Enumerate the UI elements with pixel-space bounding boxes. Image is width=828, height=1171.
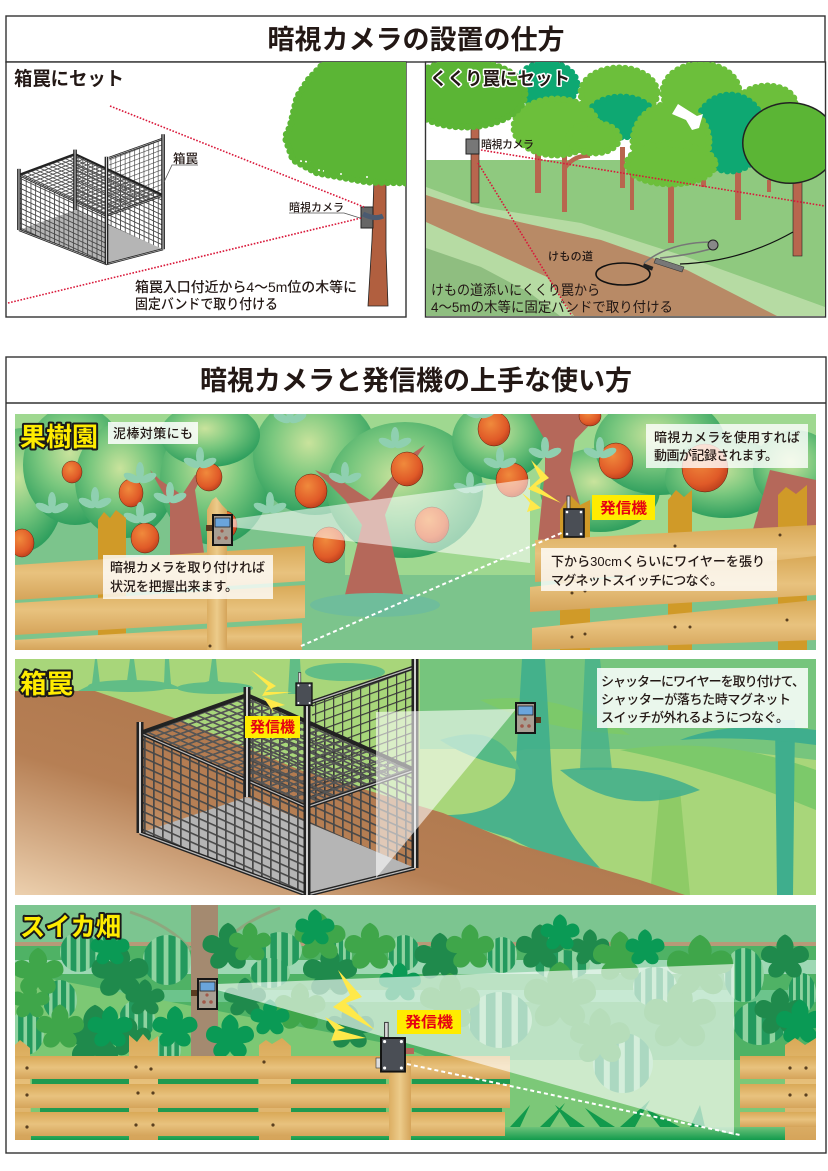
- panel: snare trap setup: [405, 61, 828, 317]
- callout: video: 動画が記録されます。: [654, 448, 778, 463]
- cage illustration: [19, 134, 163, 264]
- camera: [191, 979, 217, 1009]
- panel: watermelon field: [8, 905, 824, 1140]
- callout: shutter: シャッターが落ちた時マグネット: [601, 692, 791, 707]
- callout: video: [646, 424, 808, 468]
- heading: snare trap: くくり罠にセット: [430, 69, 570, 89]
- callout: shutter: シャッターにワイヤーを取り付けて、: [601, 674, 805, 689]
- centre post: [389, 1060, 411, 1140]
- dashed wire: [301, 531, 566, 646]
- background trees: [514, 63, 795, 243]
- callout: video: 暗視カメラを使用すれば: [654, 430, 800, 445]
- lightning: [522, 460, 561, 512]
- field scene: [8, 905, 824, 1140]
- left tree: [426, 62, 528, 204]
- red dotted camera range lines: [8, 106, 364, 303]
- tree: [130, 905, 280, 1070]
- watermelons: [8, 932, 816, 1093]
- back posts: [98, 485, 807, 650]
- lightning: [251, 670, 292, 713]
- label: box trap: 箱罠: [20, 669, 73, 699]
- leaf clusters: [36, 414, 616, 524]
- label: night camera: 暗視カメラ: [289, 200, 344, 214]
- label: orchard: 果樹園: [20, 422, 98, 452]
- panel: box trap setup: [6, 62, 406, 317]
- grass and bottom band: [15, 1100, 816, 1140]
- conifer trunks: [440, 659, 816, 895]
- fence boards right: [740, 1056, 816, 1127]
- camera on tree: [466, 139, 479, 154]
- fence right: [530, 525, 816, 650]
- callout: theft: 泥棒対策にも: [113, 426, 193, 441]
- instruction text line 2: 固定バンドで取り付ける: [135, 296, 278, 312]
- large cage: [140, 659, 415, 895]
- fence boards left: [15, 1056, 510, 1136]
- tag: transmitter: 発信機: [600, 499, 647, 517]
- transmitter: [296, 673, 312, 705]
- callout: situation: 暗視カメラを取り付ければ: [110, 560, 265, 575]
- callout: wire: マグネットスイッチにつなぐ。: [551, 573, 723, 588]
- snare scene: [405, 61, 828, 316]
- panel: box trap usage: [15, 659, 816, 895]
- orchard scene: [15, 414, 816, 650]
- instruction text: けもの道添いにくくり罠から: [431, 282, 600, 298]
- camera beam: [217, 964, 734, 1135]
- instruction text: 箱罠入口付近から4～5m位の木等に: [135, 279, 357, 295]
- callout: wire: 下から30cmくらいにワイヤーを張り: [551, 554, 765, 569]
- label: night camera: [289, 200, 360, 218]
- heading: box trap: 箱罠にセット: [14, 68, 124, 90]
- tag: transmitter: [592, 495, 655, 520]
- instruction text line 2: 4～5mの木等に固定バンドで取り付ける: [431, 299, 673, 315]
- tag: transmitter: 発信機: [405, 1013, 453, 1031]
- red dotted lines: [478, 150, 825, 316]
- label: box trap: 箱罠: [173, 151, 198, 166]
- tree with camera: [285, 62, 406, 306]
- trunks: [315, 445, 425, 603]
- fence gap foliage: [32, 1079, 510, 1112]
- tag: transmitter: 発信機: [250, 718, 295, 736]
- screws: [25, 1060, 808, 1129]
- right tree: [742, 102, 828, 256]
- camera: [516, 703, 541, 733]
- camera beam: [376, 709, 516, 878]
- dashed wire: [407, 1064, 740, 1135]
- label: camera: 暗視カメラ: [481, 137, 534, 151]
- callout: shutter: スイッチが外れるようにつなぐ。: [601, 710, 789, 725]
- panel: header box for setup section: [6, 16, 825, 62]
- callout: situation: [103, 555, 273, 599]
- panel: orchard: [15, 414, 816, 650]
- melon leaves: [11, 909, 824, 1064]
- tree foliage: [15, 414, 816, 558]
- brown ground: [15, 691, 685, 895]
- label: box trap: [164, 151, 198, 182]
- title: setup: 暗視カメラの設置の仕方: [268, 25, 564, 55]
- callout: theft: [108, 422, 198, 444]
- transmitter: [376, 1022, 414, 1072]
- apples: [10, 406, 728, 563]
- fence left: [15, 546, 305, 650]
- transmitter: [564, 496, 584, 537]
- title: usage: 暗視カメラと発信機の上手な使い方: [200, 366, 632, 396]
- pole with camera: [207, 497, 227, 650]
- tag: transmitter: [245, 716, 300, 738]
- tag: transmitter: [397, 1010, 461, 1034]
- forest and ground: [15, 659, 816, 895]
- snare device: [596, 232, 793, 285]
- camera beam: [232, 479, 530, 563]
- label: watermelon field: スイカ畑: [20, 912, 121, 942]
- label: animal trail: けもの道: [548, 249, 593, 263]
- lightning: [325, 970, 375, 1041]
- callout: shutter: [597, 668, 808, 728]
- camera: [206, 515, 232, 545]
- screws: [208, 534, 788, 648]
- callout: wire: [541, 548, 777, 591]
- fence posts: [15, 1034, 816, 1140]
- callout: situation: 状況を把握出来ます。: [110, 579, 238, 594]
